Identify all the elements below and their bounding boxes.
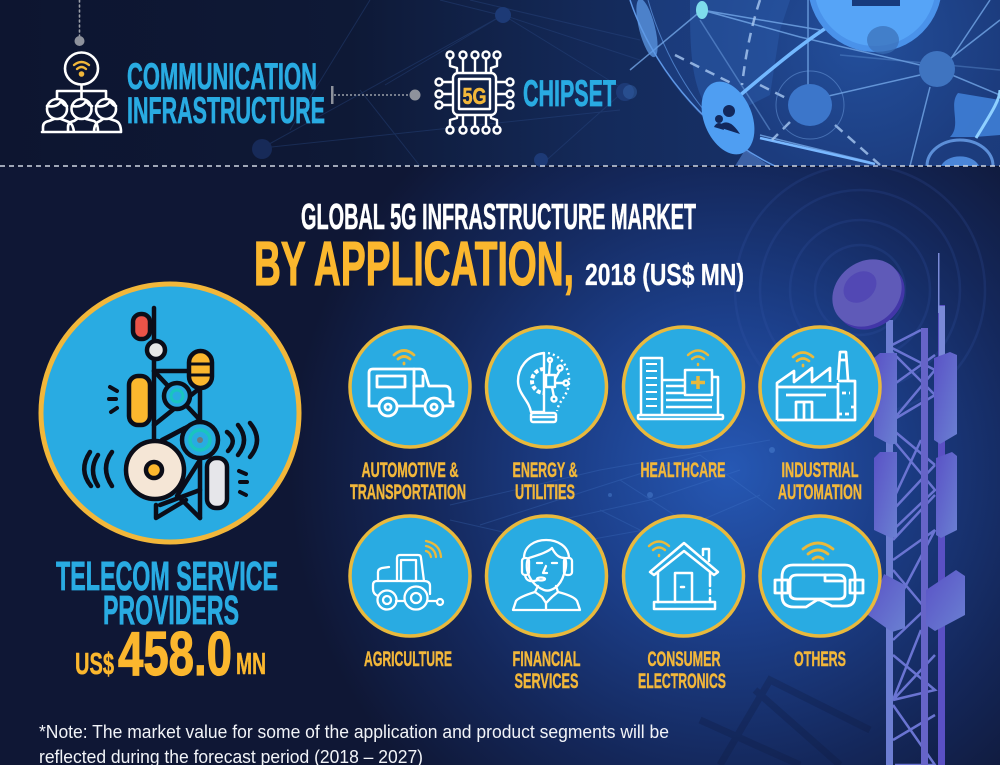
heading: communication infrastructure: INFRASTRUCTURE (127, 90, 325, 131)
heading: telecom service providers: TELECOM SERVICE (56, 553, 278, 599)
item: healthcare: HEALTHCARE (640, 459, 726, 482)
icon: factory (777, 352, 855, 420)
illustration: faint signal arcs (735, 165, 985, 415)
item: consumer electronics (624, 516, 744, 693)
title: 2018 (US$ MN) (585, 257, 744, 292)
item: agriculture (350, 516, 470, 671)
illustration: purple tower (819, 245, 965, 765)
item: energy and utilities: UTILITIES (515, 481, 575, 504)
icon: telecom tower (41, 284, 299, 542)
heading: communication infrastructure: COMMUNICATION (127, 56, 317, 97)
icon: 5G chip: 5G (462, 83, 486, 109)
icon: bulb (518, 353, 569, 422)
heading: chipset: CHIPSET (523, 73, 616, 114)
value: 458.0: MN (236, 646, 266, 681)
icon: 5G chip (436, 52, 514, 134)
item: automotive and transportation: TRANSPORTATION (350, 481, 466, 504)
panel: telecom service providers (41, 284, 299, 689)
value: 458.0: US$ (75, 646, 114, 681)
panel: telecom service providers: PROVIDERS (103, 587, 239, 633)
item: financial services: FINANCIAL (512, 648, 581, 671)
divider: dashed line (0, 165, 1000, 167)
icon: truck (369, 350, 453, 416)
item: industrial automation (760, 327, 880, 504)
icon: VR headset (775, 543, 863, 607)
item: agriculture: AGRICULTURE (364, 648, 452, 671)
item: others: OTHERS (794, 648, 846, 671)
icon: node right (919, 51, 955, 87)
connector (331, 86, 420, 104)
item: industrial automation: AUTOMATION (778, 481, 862, 504)
item: financial services (486, 516, 606, 693)
value: 458.0: 458.0 (118, 620, 232, 689)
icon: communication infrastructure (42, 0, 121, 132)
background: top band (0, 0, 1000, 167)
title (254, 196, 744, 299)
title: BY APPLICATION, (254, 230, 574, 299)
item: industrial automation: INDUSTRIAL (782, 459, 859, 482)
item: energy and utilities (486, 327, 606, 504)
icon: smart house (649, 542, 718, 609)
illustration: satellite dish (819, 245, 918, 344)
item: financial services: SERVICES (514, 670, 578, 693)
item: consumer electronics: ELECTRONICS (638, 670, 726, 693)
item: others (760, 516, 880, 671)
illustration: network globe (623, 0, 1000, 166)
icon: node (788, 84, 832, 126)
icon: tractor (373, 541, 443, 610)
item: automotive and transportation: AUTOMOTIVE & (362, 459, 458, 482)
title: GLOBAL 5G INFRASTRUCTURE MARKET (301, 196, 696, 237)
icon: person disc (692, 74, 770, 166)
heading: communication infrastructure (127, 56, 325, 131)
item: energy and utilities: ENERGY & (512, 459, 578, 482)
icon: hospital (638, 350, 723, 419)
note: *Note: The market value for some of the application and product segments will be (39, 722, 669, 742)
icon: call-center agent (513, 540, 580, 610)
item: consumer electronics: CONSUMER (648, 648, 720, 671)
note (39, 722, 669, 765)
item: healthcare (624, 327, 744, 482)
item: automotive and transportation (350, 327, 470, 504)
